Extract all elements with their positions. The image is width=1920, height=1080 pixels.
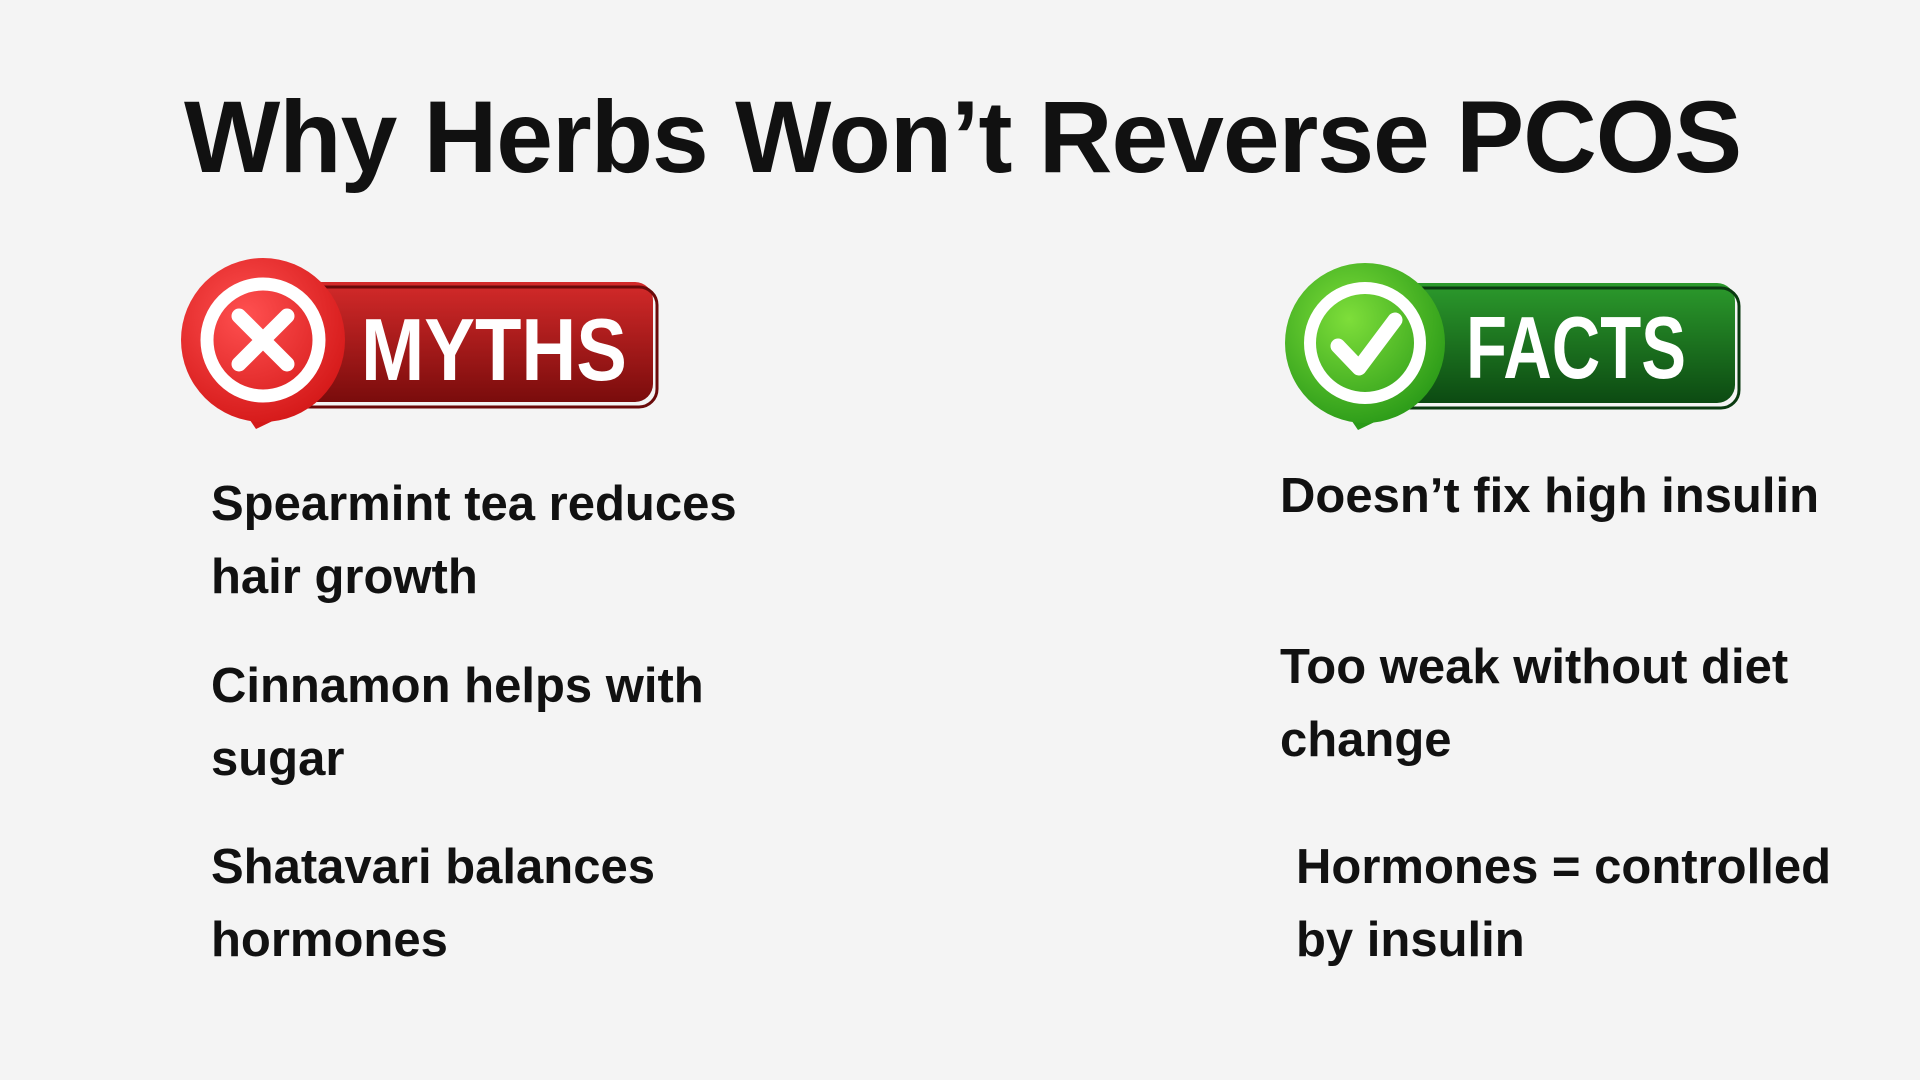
badge: myths (181, 258, 658, 429)
myth 3: hormones (211, 913, 448, 967)
title: Why Herbs Won’t Reverse PCOS (184, 80, 1741, 194)
myth 2 (211, 659, 704, 786)
badge: facts (1285, 263, 1740, 430)
myth 3: Shatavari balances (211, 840, 655, 894)
fact 1: Doesn’t fix high insulin (1280, 469, 1819, 523)
fact 2: change (1280, 713, 1452, 767)
fact 2: Too weak without diet (1280, 640, 1788, 694)
fact 3 (1296, 840, 1831, 967)
myth 1: Spearmint tea reduces (211, 477, 737, 531)
fact 3: Hormones = controlled (1296, 840, 1831, 894)
myth 2: sugar (211, 732, 344, 786)
myth 3 (211, 840, 655, 967)
badge: myths: MYTHS (361, 300, 627, 399)
myth 1 (211, 477, 737, 604)
myth 2: Cinnamon helps with (211, 659, 704, 713)
fact 2 (1280, 640, 1788, 767)
fact 3: by insulin (1296, 913, 1525, 967)
myth 1: hair growth (211, 550, 478, 604)
